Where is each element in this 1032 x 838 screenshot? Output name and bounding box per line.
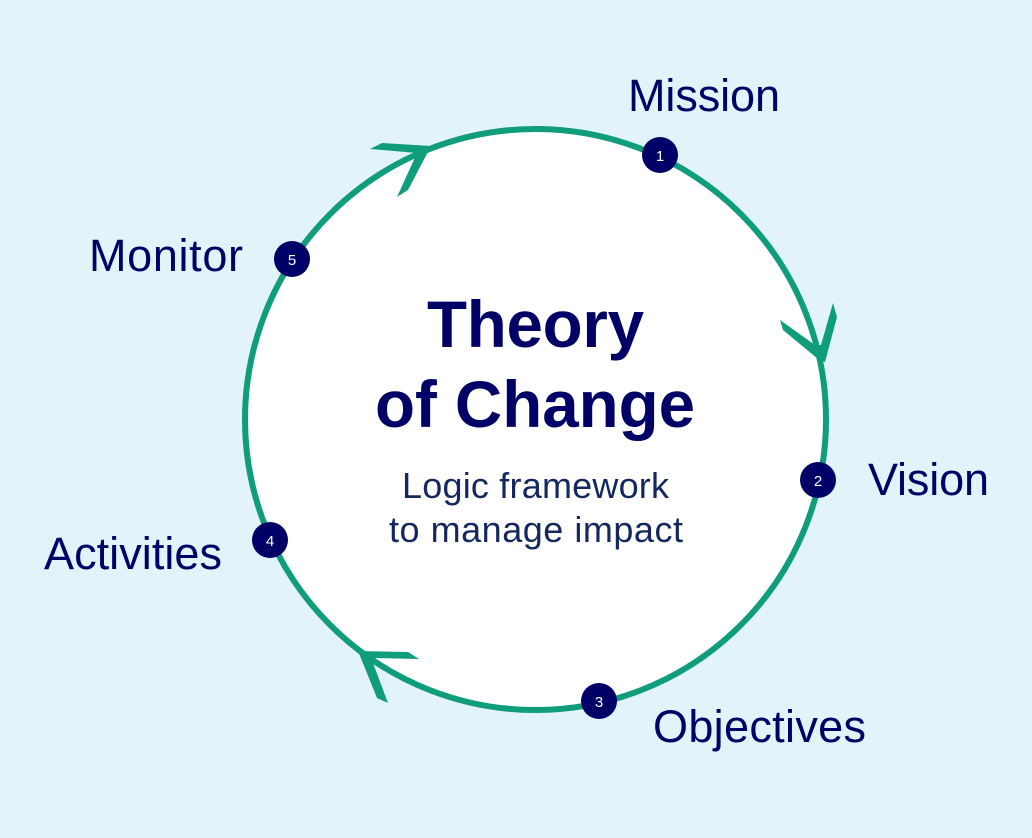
- arrow: bottom left: [358, 651, 419, 703]
- arrow: right: [780, 303, 837, 362]
- heading line 2: of Change: [375, 368, 695, 441]
- step 2: Vision: [800, 454, 989, 505]
- step 3: Objectives: [581, 683, 866, 752]
- step 1: Mission: 1: [656, 148, 664, 165]
- step 4: Activities: Activities: [44, 528, 222, 579]
- step 3: Objectives: Objectives: [653, 701, 866, 752]
- step 5: Monitor: 5: [288, 252, 296, 269]
- subtitle: [389, 465, 683, 550]
- step 5: Monitor: Monitor: [89, 230, 243, 281]
- cycle ring: [245, 129, 826, 710]
- step 1: Mission: [628, 70, 780, 173]
- step 4: Activities: [44, 522, 288, 579]
- step 3: Objectives: 3: [595, 694, 603, 711]
- heading: Theory: [427, 288, 645, 361]
- step 2: Vision: Vision: [868, 454, 989, 505]
- subtitle: to manage impact: [389, 509, 683, 550]
- step 5: Monitor: [89, 230, 310, 281]
- arrow: top left: [370, 143, 431, 197]
- subtitle: Logic framework: [402, 465, 670, 506]
- step 2: Vision: 2: [814, 473, 822, 490]
- step 4: Activities: 4: [266, 533, 274, 550]
- step 1: Mission: Mission: [628, 70, 780, 121]
